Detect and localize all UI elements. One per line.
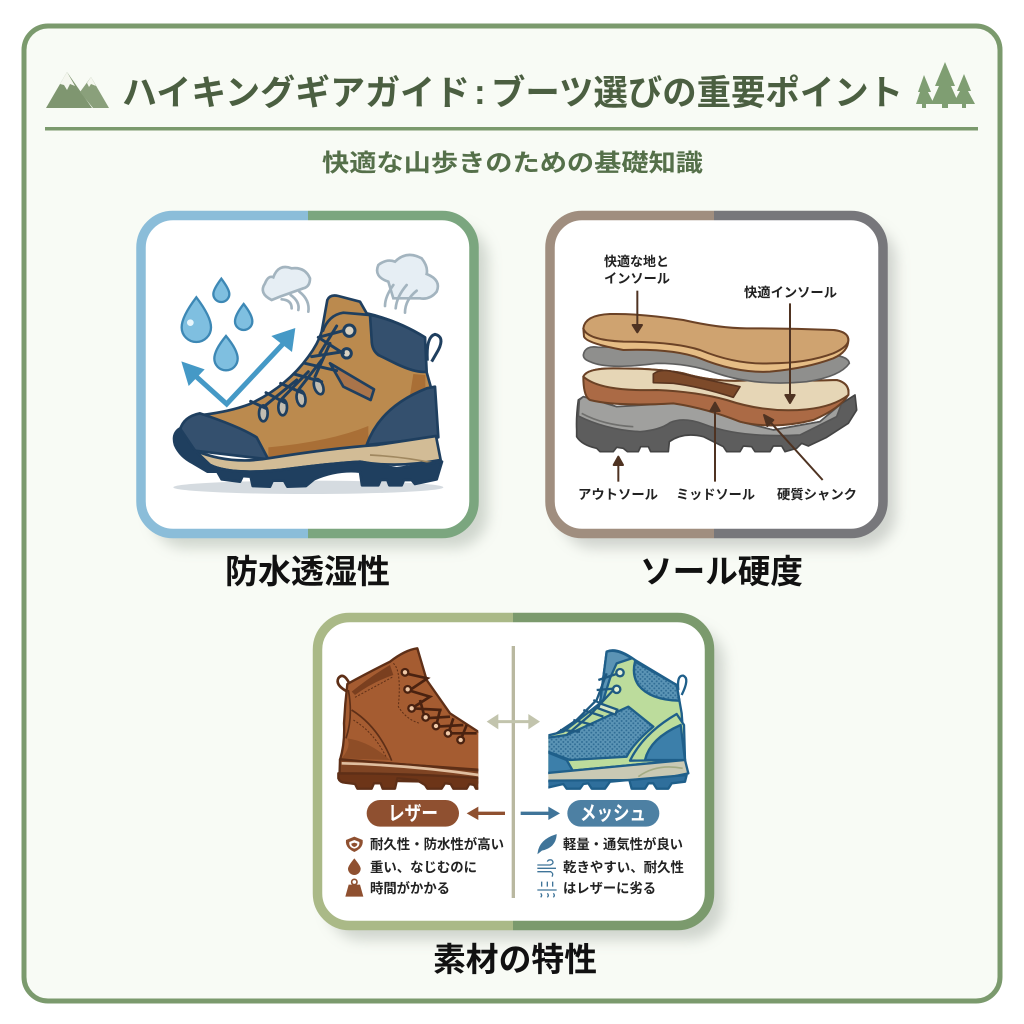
- heading: sole stiffness: ソール硬度: [640, 553, 803, 590]
- badge labels: レザー: [388, 802, 438, 825]
- illustration: material comparison: [338, 646, 688, 898]
- list text: mesh: 乾きやすい、耐久性: [563, 859, 684, 875]
- laces: [251, 325, 355, 421]
- midsole: [583, 368, 849, 425]
- list text: mesh: 軽量・通気性が良い: [563, 836, 683, 852]
- list text: leather: 時間がかかる: [370, 880, 450, 896]
- illustration: hiking boot with water and vapour: [173, 255, 443, 494]
- list text: mesh: はレザーに劣る: [563, 880, 656, 896]
- title: :: [474, 73, 486, 112]
- boot: [174, 295, 442, 487]
- outsole: [577, 395, 857, 452]
- shank: [653, 370, 740, 397]
- divider and arrow: [487, 646, 540, 898]
- icons: mesh list: [537, 835, 557, 897]
- icons: leather list: [345, 837, 363, 897]
- panel: material properties: [318, 618, 724, 940]
- title: ハイキングギアガイド: [122, 74, 470, 113]
- list text: leather: 重い、なじむのに: [370, 860, 477, 875]
- panel: sole stiffness: [550, 216, 896, 548]
- icon: mountains: [46, 72, 109, 108]
- icon: vapour clouds: [263, 255, 438, 313]
- header rule: [45, 127, 978, 130]
- subtitle: 快適な山歩きのための基礎知識: [322, 150, 703, 177]
- grey layer: [583, 347, 849, 383]
- panel: waterproof breathability: [141, 216, 488, 548]
- badge labels: [388, 802, 646, 825]
- heading: waterproof: 防水透湿性: [225, 553, 390, 590]
- title: [122, 73, 903, 113]
- leather boot: [338, 648, 483, 789]
- list text: leather: 耐久性・防水性が高い: [370, 836, 504, 852]
- icon: moisture arrows: [181, 328, 295, 404]
- laces: leather: [402, 669, 477, 743]
- list text: mesh: [563, 836, 684, 896]
- labels: sole parts: ミッドソール: [676, 487, 755, 502]
- mesh boot: [543, 650, 688, 789]
- badge: leather: [367, 800, 505, 827]
- badge: mesh: [521, 800, 659, 827]
- labels: sole parts: 快適インソール: [744, 284, 837, 300]
- labels: sole parts: アウトソール: [578, 487, 658, 502]
- diagram: sole layers: [577, 291, 857, 482]
- heading: materials: 素材の特性: [433, 941, 597, 978]
- icon: water drops: [182, 279, 252, 370]
- labels: sole parts: 硬質シャンク: [777, 486, 857, 502]
- header: [45, 62, 978, 177]
- icon: trees: [916, 62, 975, 108]
- labels: sole parts: [578, 253, 857, 502]
- list text: leather: [370, 836, 504, 896]
- labels: sole parts: インソール: [604, 271, 670, 286]
- laces: mesh: [557, 669, 624, 735]
- arrows: [614, 291, 823, 482]
- insole: [583, 314, 848, 372]
- badge labels: メッシュ: [580, 803, 646, 825]
- labels: sole parts: 快適な地と: [604, 253, 669, 269]
- title: ブーツ選びの重要ポイント: [491, 73, 903, 113]
